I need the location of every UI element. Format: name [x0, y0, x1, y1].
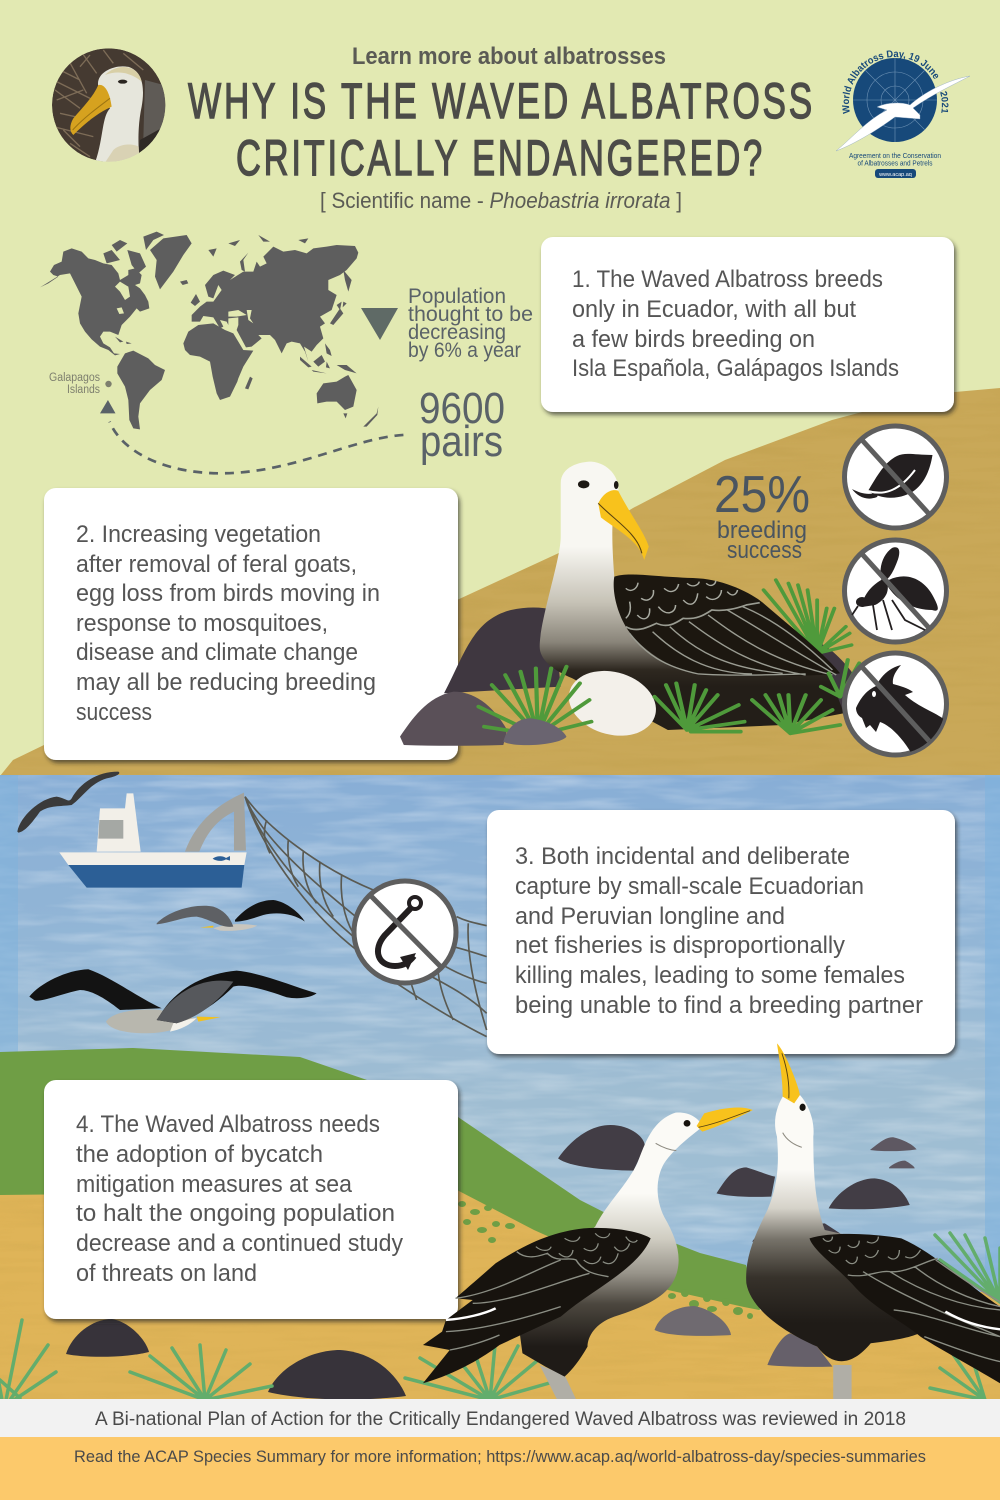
- stat: 25% breeding success: success: [727, 537, 802, 564]
- panel: card 2: disease and climate change: [76, 639, 358, 666]
- green headland: [0, 1048, 760, 1310]
- panel: card 2: success: [76, 699, 152, 726]
- offshore rocks: [558, 1125, 917, 1367]
- panel: card 3: killing males, leading to some females: [515, 962, 905, 989]
- icon: no vegetation: [844, 426, 946, 528]
- illustration: medium albatross in flight: [157, 900, 305, 931]
- panel: card 2: may all be reducing breeding: [76, 669, 376, 696]
- stat: 25% breeding success: 25%: [714, 466, 810, 524]
- title: CRITICALLY ENDANGERED?: [236, 130, 765, 186]
- panel: card 1: 1. The Waved Albatross breeds: [572, 266, 883, 293]
- panel: card 2: [44, 488, 458, 760]
- icon: no mosquitoes: [844, 540, 946, 642]
- panel: card 4: mitigation measures at sea: [76, 1171, 353, 1198]
- stat: 25% breeding success: [714, 466, 810, 564]
- sand foreground: [0, 1190, 1000, 1400]
- population decline text: Population: [408, 285, 506, 308]
- population decline text: thought to be: [408, 303, 533, 326]
- panel: card 4: [44, 1080, 458, 1319]
- footer bar: more information: [0, 1437, 1000, 1500]
- stat: 9600 pairs: [419, 384, 505, 466]
- illustration: large albatross in flight: [29, 969, 317, 1033]
- population decline text: by 6% a year: [408, 339, 521, 362]
- panel: card 3: net fisheries is disproportionally: [515, 932, 845, 959]
- illustration: nesting albatross with egg: [400, 462, 859, 748]
- panel: card 2: egg loss from birds moving in: [76, 580, 380, 607]
- panel: card 4: the adoption of bycatch: [76, 1141, 323, 1168]
- panel: card 3: and Peruvian longline and: [515, 903, 785, 930]
- panel: card 1: only in Ecuador, with all but: [572, 296, 856, 323]
- illustration: distant seabird: [17, 772, 119, 833]
- illustration: right courting albatross: [746, 1043, 1000, 1399]
- population decline text: decreasing: [408, 321, 506, 344]
- logo: World Albatross Day: www.acap.aq: [878, 172, 912, 178]
- scientific name: [ Scientific name - Phoebastria irrorata ]: [320, 188, 682, 213]
- panel: card 3: capture by small-scale Ecuadorian: [515, 873, 864, 900]
- decline arrow: [361, 308, 398, 340]
- stat: 9600 pairs: pairs: [420, 417, 503, 466]
- Galapagos label and marker: [49, 372, 112, 396]
- stat: 9600 pairs: 9600: [419, 384, 505, 433]
- illustration: fishing boat: [59, 793, 247, 888]
- illustration: fishing net: [245, 797, 487, 1037]
- footer bar: more information: Read the ACAP Species Summary for more information; https://www.acap.aq/world-albatross-day/species-summaries: [74, 1447, 926, 1466]
- dashed migration arrow: [100, 400, 403, 473]
- logo: World Albatross Day: World Albatross Day, 19 June: [842, 50, 938, 114]
- footer bar: plan of action: [0, 1399, 1000, 1437]
- icon: no goats: [844, 653, 946, 760]
- panel: card 1: [541, 237, 954, 412]
- panel: card 1: Isla Española, Galápagos Islands: [572, 355, 899, 382]
- panel: card 4: to halt the ongoing population: [76, 1200, 395, 1227]
- panel: card 2: 2. Increasing vegetation: [76, 521, 321, 548]
- panel: card 3: [487, 810, 955, 1054]
- Galapagos label and marker: Galapagos: [49, 372, 100, 384]
- rocks at bottom left: [66, 1319, 406, 1399]
- Galapagos label and marker: Islands: [67, 384, 100, 396]
- icon: no fishing hooks: [354, 881, 456, 983]
- panel: card 1: a few birds breeding on: [572, 326, 815, 353]
- world map: Americas: [40, 232, 192, 429]
- panel: card 3: 3. Both incidental and deliberate: [515, 843, 850, 870]
- logo: World Albatross Day: Agreement on the Conservation: [849, 153, 941, 160]
- title: [188, 73, 815, 186]
- logo: World Albatross Day: of Albatrosses and Petrels: [858, 160, 933, 168]
- panel: card 4: decrease and a continued study: [76, 1230, 403, 1257]
- hill: upper sand slope: [0, 388, 1000, 776]
- sea background: [0, 775, 1000, 1305]
- panel: card 3: being unable to find a breeding partner: [515, 992, 923, 1019]
- illustration: left courting albatross: [423, 1108, 753, 1399]
- panel: card 2: response to mosquitoes,: [76, 610, 328, 637]
- kicker heading: Learn more about albatrosses: [352, 43, 666, 70]
- logo: World Albatross Day: [836, 50, 970, 178]
- panel: card 2: after removal of feral goats,: [76, 551, 357, 578]
- grass tufts foreground: [0, 1233, 1000, 1400]
- footer bar: plan of action: A Bi-national Plan of Action for the Critically Endangered Waved Albatross was reviewed in 2018: [95, 1409, 906, 1430]
- panel: card 4: 4. The Waved Albatross needs: [76, 1111, 380, 1138]
- world map: Europe, Africa, Asia, Oceania: [183, 235, 378, 427]
- portrait photo of albatross head: [52, 48, 170, 163]
- panel: card 4: of threats on land: [76, 1260, 257, 1287]
- population decline text: [408, 285, 533, 362]
- logo: World Albatross Day: 2021: [940, 91, 948, 113]
- stat: 25% breeding success: breeding: [717, 517, 807, 544]
